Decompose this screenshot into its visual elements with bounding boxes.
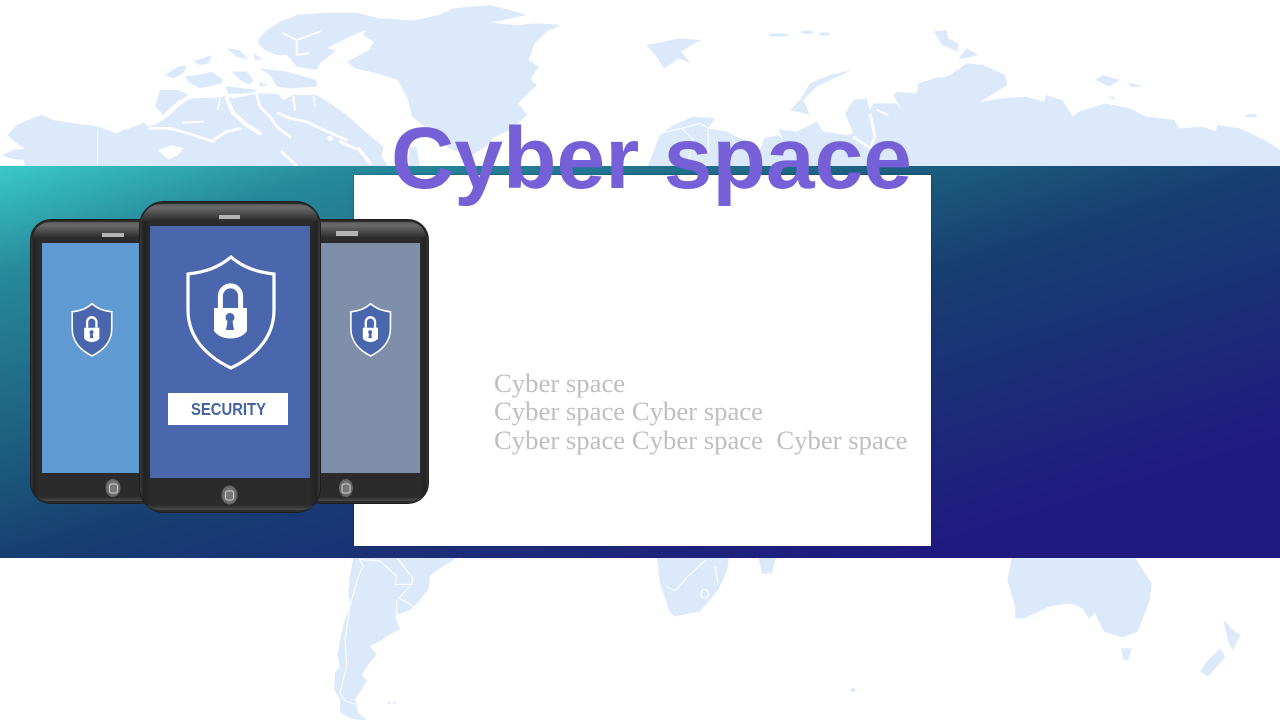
map: North America xyxy=(0,13,420,167)
phone: centre xyxy=(139,201,321,513)
gradient band xyxy=(0,166,1280,558)
phone: right xyxy=(300,219,429,504)
body text: Cyber space Cyber space Cyber space Cyber space Cyber space Cyber space xyxy=(494,368,908,455)
map: Africa and Oceania xyxy=(657,557,1241,692)
phone: left xyxy=(30,219,160,504)
security label xyxy=(168,393,288,425)
map: Greenland xyxy=(347,5,561,157)
white content panel xyxy=(354,175,931,546)
icon: shield left xyxy=(72,304,112,356)
map: South America xyxy=(334,558,458,720)
icon: shield with padlock xyxy=(188,257,274,368)
security label: SECURITY xyxy=(191,399,266,419)
map: Arctic islands and Siberia xyxy=(646,30,1280,167)
icon: shield right xyxy=(351,304,390,356)
map: Scandinavia and western Russia xyxy=(647,70,940,168)
title: Cyber space xyxy=(391,109,912,207)
